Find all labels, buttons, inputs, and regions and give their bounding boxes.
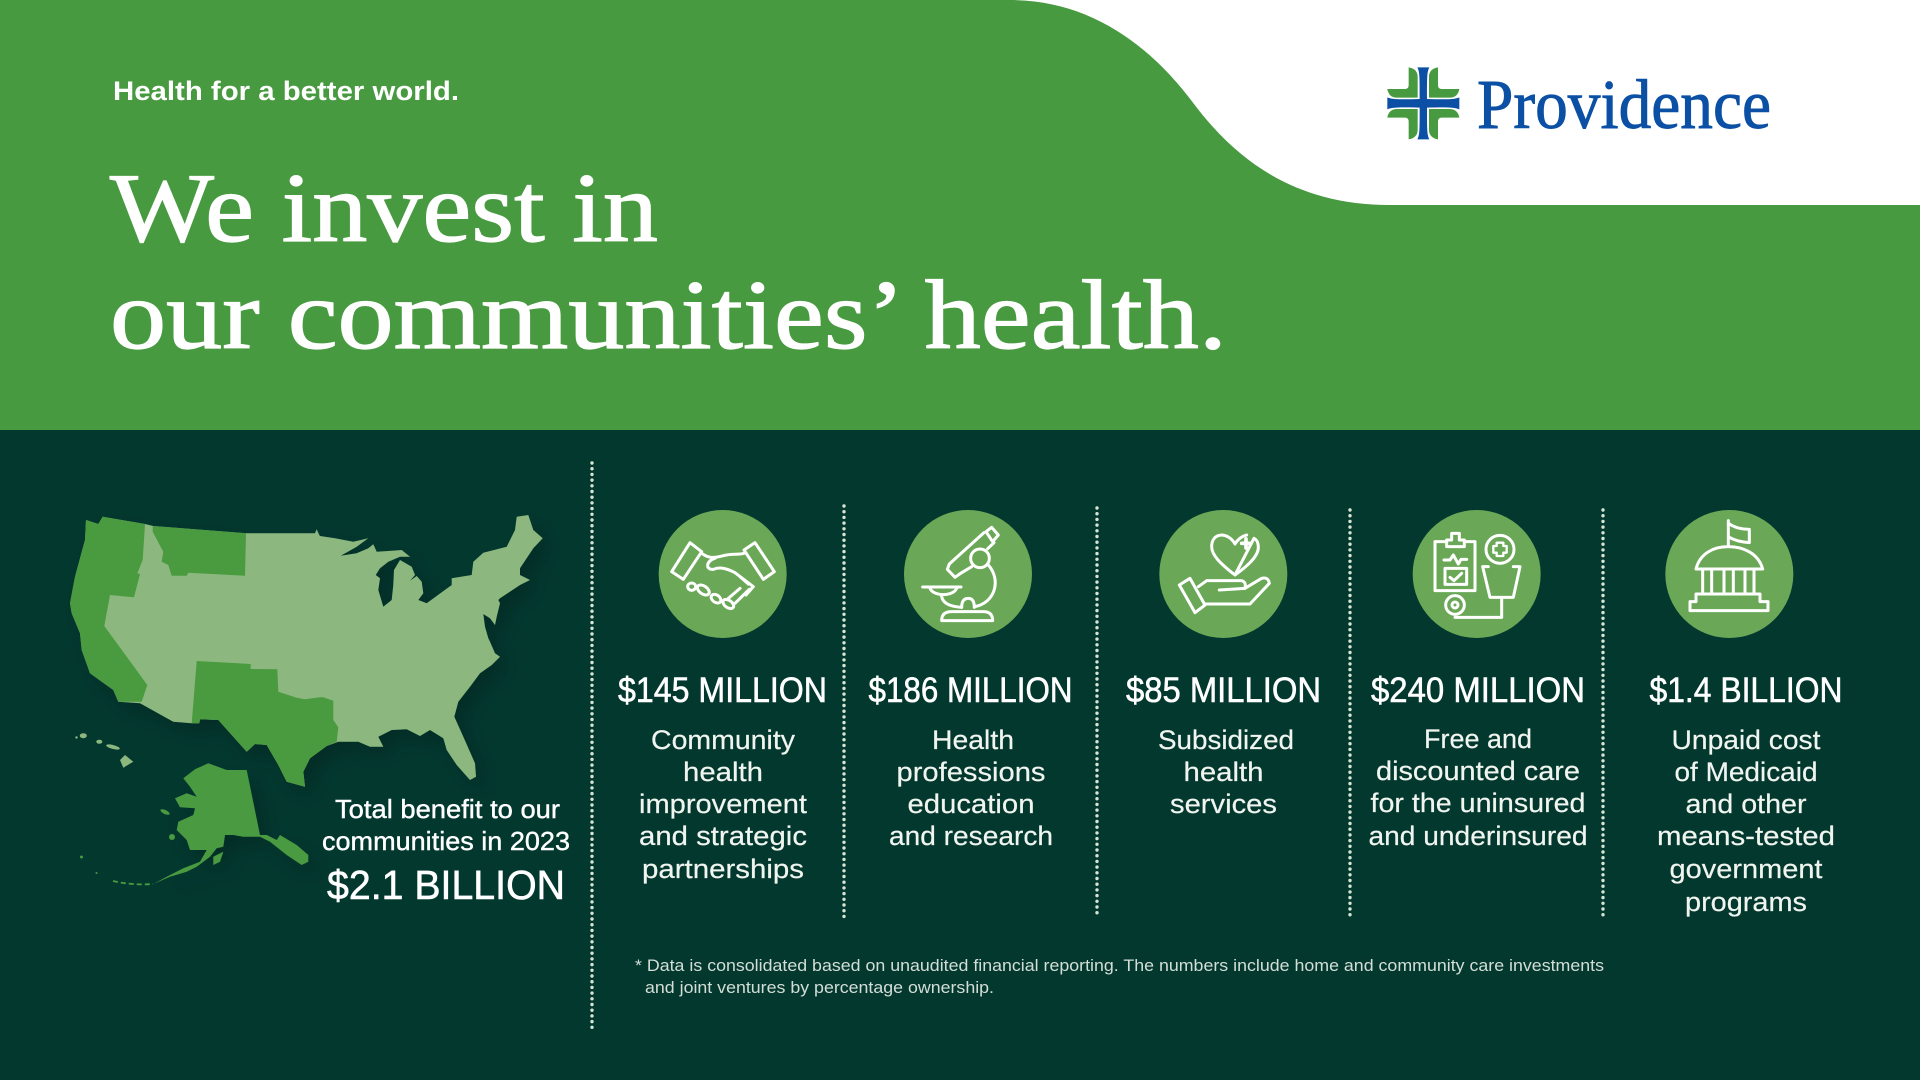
column: health professions <box>868 510 1072 851</box>
description: programs <box>1685 887 1807 917</box>
description: and underinsured <box>1368 821 1588 851</box>
stat: $186 MILLION <box>868 671 1072 710</box>
description: and other <box>1686 789 1807 819</box>
tagline: Health for a better world. <box>113 76 459 106</box>
Montana and Wyoming <box>153 526 246 576</box>
description: discounted care <box>1376 756 1580 786</box>
stat: $1.4 BILLION <box>1650 671 1842 710</box>
description: services <box>1170 789 1277 819</box>
total benefit callout: communities in 2023 <box>322 826 570 856</box>
description: Unpaid cost <box>1672 725 1821 755</box>
description: Health <box>932 725 1014 755</box>
West Coast states <box>70 517 147 702</box>
total benefit callout: Total benefit to our <box>335 794 560 824</box>
icon: handshake <box>659 510 787 638</box>
white logo corner shape <box>1010 0 1920 205</box>
description: Community <box>651 725 796 755</box>
Aleutian islands <box>113 881 153 884</box>
description <box>1158 725 1294 819</box>
description <box>889 725 1053 851</box>
Alaska <box>80 763 308 884</box>
column: subsidized services <box>1126 510 1321 819</box>
icon: government building <box>1665 510 1793 638</box>
description: and research <box>889 821 1053 851</box>
description <box>1368 724 1588 851</box>
contiguous states <box>70 515 543 787</box>
description: Subsidized <box>1158 725 1294 755</box>
title: our communities’ health. <box>110 261 1227 370</box>
description: professions <box>896 757 1046 787</box>
header band <box>0 0 1920 430</box>
icon: microscope <box>904 510 1032 638</box>
total benefit callout: $2.1 BILLION <box>327 862 565 908</box>
description: for the uninsured <box>1370 788 1586 818</box>
description: improvement <box>639 789 808 819</box>
footnote: and joint ventures by percentage ownership. <box>645 978 994 997</box>
Hawaii <box>75 733 133 768</box>
icon: clipboard and stethoscope <box>1413 510 1541 638</box>
logo wordmark: Providence <box>1477 67 1771 144</box>
column: unpaid Medicaid cost <box>1650 510 1842 917</box>
map of the United States <box>70 515 543 884</box>
icon: logo cross <box>1387 67 1459 139</box>
title: We invest in <box>110 154 658 263</box>
description: health <box>1184 757 1264 787</box>
New Mexico and Texas <box>192 661 338 787</box>
stat: $85 MILLION <box>1126 671 1321 710</box>
description: education <box>908 789 1034 819</box>
total benefit callout <box>322 794 570 908</box>
logo: Providence <box>1387 67 1771 144</box>
description <box>639 725 808 884</box>
stat: $145 MILLION <box>618 671 827 710</box>
description: and strategic <box>639 821 807 851</box>
description: partnerships <box>642 854 804 884</box>
dotted dividers <box>592 463 1603 1030</box>
column: free and discounted care <box>1368 510 1588 851</box>
icon: hand holding heart <box>1159 510 1287 638</box>
description <box>1657 725 1835 917</box>
title <box>110 154 1227 370</box>
description: health <box>683 757 763 787</box>
description: means-tested <box>1657 821 1835 851</box>
column: community health <box>618 510 827 884</box>
description: Free and <box>1424 724 1532 754</box>
description: of Medicaid <box>1674 757 1818 787</box>
footnote <box>635 956 1604 997</box>
description: government <box>1670 854 1823 884</box>
footnote: * Data is consolidated based on unaudited financial reporting. The numbers include home and community care investments <box>635 956 1604 975</box>
stat: $240 MILLION <box>1371 671 1585 710</box>
